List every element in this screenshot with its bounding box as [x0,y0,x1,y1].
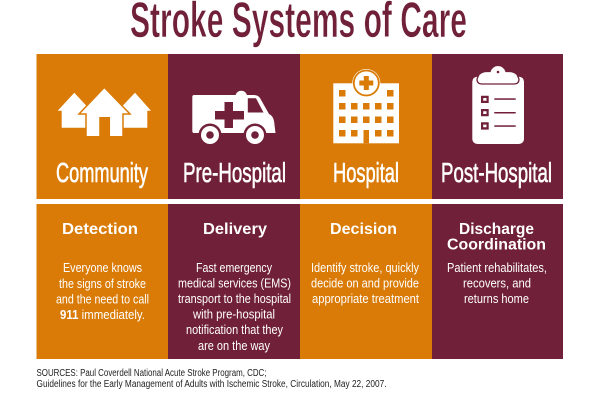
panel: post-hospital header [432,54,563,199]
text: decision body: appropriate treatment [312,291,419,306]
text: detection body: 911 immediately. [60,307,145,322]
icon: houses [58,87,151,137]
icon: ambulance [192,91,276,146]
text: delivery body: with pre-hospital [192,306,275,322]
label: pre-hospital: Pre-Hospital [183,157,286,188]
text: discharge body: recovers, and [463,276,531,290]
icon: hospital building [333,69,399,143]
label: hospital: Hospital [333,157,399,188]
text: decision body: decide on and provide [311,276,419,290]
text: decision body: Identify stroke, quickly [311,260,419,275]
text: detection body: and the need to call [56,292,149,306]
heading: discharge coordination [447,221,546,254]
heading: detection: Detection [62,221,138,238]
panel: pre-hospital header [168,54,300,199]
heading: discharge coordination: Coordination [447,236,546,254]
label: community: Community [56,157,148,188]
text: delivery body: are on the way [198,338,270,353]
panel: community header [36,54,168,199]
text: delivery body [178,260,291,353]
heading: discharge coordination: Discharge [459,221,534,238]
text: discharge body [447,260,547,306]
text: delivery body: medical services (EMS) [178,276,291,290]
icon: clipboard checklist [472,65,524,144]
panel: hospital header [300,54,432,199]
text: delivery body: Fast emergency [196,260,272,275]
text: detection body: Everyone knows [63,260,142,275]
panel: discharge coordination [432,204,563,359]
text: detection body: the signs of stroke [59,276,146,291]
sources: SOURCES: Paul Coverdell National Acute Stroke Program, CDC; [36,368,266,379]
text: delivery body: notification that they [186,322,283,337]
panel: delivery [168,204,300,359]
text: discharge body: Patient rehabilitates, [447,260,547,275]
text: detection body [56,260,149,322]
sources: Guidelines for the Early Management of Adults with Ischemic Stroke, Circulation, May 22, 2007. [36,379,386,390]
text: discharge body: returns home [464,291,529,306]
text: decision body [311,260,419,306]
text: delivery body: transport to the hospital [178,291,291,306]
sources [36,368,386,390]
panel: decision [300,204,432,359]
panel: detection [36,204,168,359]
heading: decision: Decision [330,221,397,238]
heading: delivery: Delivery [203,221,267,238]
